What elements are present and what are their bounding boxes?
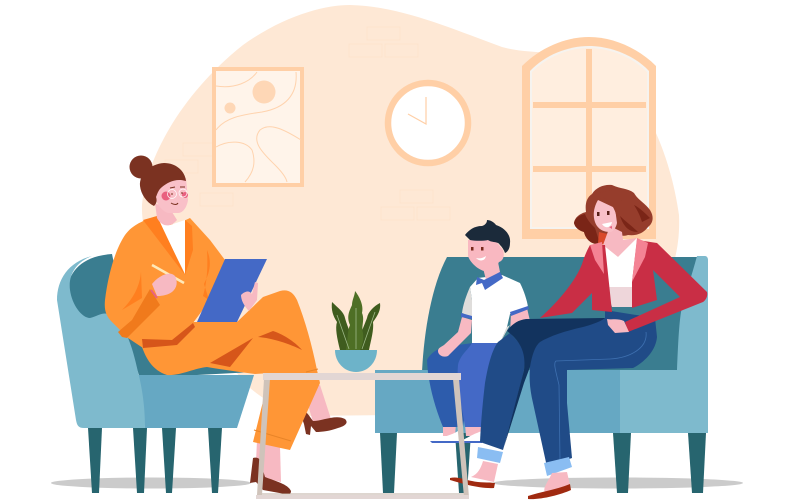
boy hair [465, 220, 510, 253]
mother shoes [450, 477, 571, 499]
boy eyes and mouth [471, 247, 484, 250]
therapist raised foot and heel [303, 385, 331, 422]
mother [450, 185, 707, 499]
boy left arm [438, 317, 472, 357]
mother jacket and arms [540, 240, 707, 332]
framed wall picture [214, 69, 302, 185]
potted plant [332, 291, 380, 372]
armchair legs [88, 428, 222, 493]
mother feet [471, 461, 570, 493]
wall clock [388, 83, 468, 163]
sleeve stripes [461, 306, 529, 319]
lapels [590, 238, 648, 282]
near leg [515, 310, 657, 467]
therapist neck [155, 203, 177, 225]
boy neck [483, 262, 500, 280]
therapist shirt [157, 218, 185, 274]
wall bricks [165, 27, 450, 220]
hand and pencil [151, 265, 184, 298]
plant leaves [332, 302, 380, 350]
hand on clipboard [241, 282, 258, 311]
boy trousers [427, 343, 473, 427]
jacket sleeve [118, 289, 160, 338]
therapist face [155, 178, 188, 213]
arched window [522, 37, 656, 239]
floor shadows [51, 478, 743, 488]
sofa legs [380, 433, 706, 493]
therapist lower leg and shoe back [256, 440, 281, 482]
boy shirt [470, 275, 528, 343]
therapist trousers [142, 290, 320, 450]
dark thigh shadow [504, 318, 605, 447]
background blob [142, 5, 679, 416]
mother neck [603, 226, 637, 257]
boy [427, 220, 530, 443]
mother shirt [603, 238, 637, 287]
clipboard [197, 259, 267, 322]
armchair back [68, 254, 130, 350]
mother jeans [480, 310, 657, 467]
boy socks and shoes [430, 424, 482, 443]
coffee table [256, 373, 469, 499]
armchair seat [125, 335, 254, 378]
boy right arm [510, 308, 530, 333]
jeans cuffs [477, 447, 572, 476]
boy collar [476, 272, 503, 290]
armchair [57, 254, 254, 493]
sofa [375, 256, 708, 493]
therapist eyes and smile [170, 187, 185, 204]
jeans seams [555, 332, 646, 460]
mother eyes and smile [597, 211, 612, 229]
boy face [468, 240, 504, 271]
mother fringe [590, 190, 626, 218]
armchair arm [57, 256, 145, 428]
trouser folds [142, 323, 302, 367]
therapist woman [105, 156, 347, 494]
jacket lapels [143, 216, 210, 300]
hand on hip [607, 319, 629, 333]
therapist hair [140, 163, 186, 206]
mother hair locks [620, 205, 650, 232]
dark hair underside [574, 214, 600, 244]
sofa arm [620, 256, 708, 433]
mother face [594, 200, 617, 232]
sofa back [422, 257, 700, 372]
glasses [168, 189, 187, 198]
plant pot [335, 350, 377, 372]
cheeks [162, 192, 188, 200]
mother hair back [574, 185, 653, 244]
sofa seat [375, 370, 620, 433]
far leg [480, 333, 525, 450]
therapist jacket [105, 216, 225, 348]
